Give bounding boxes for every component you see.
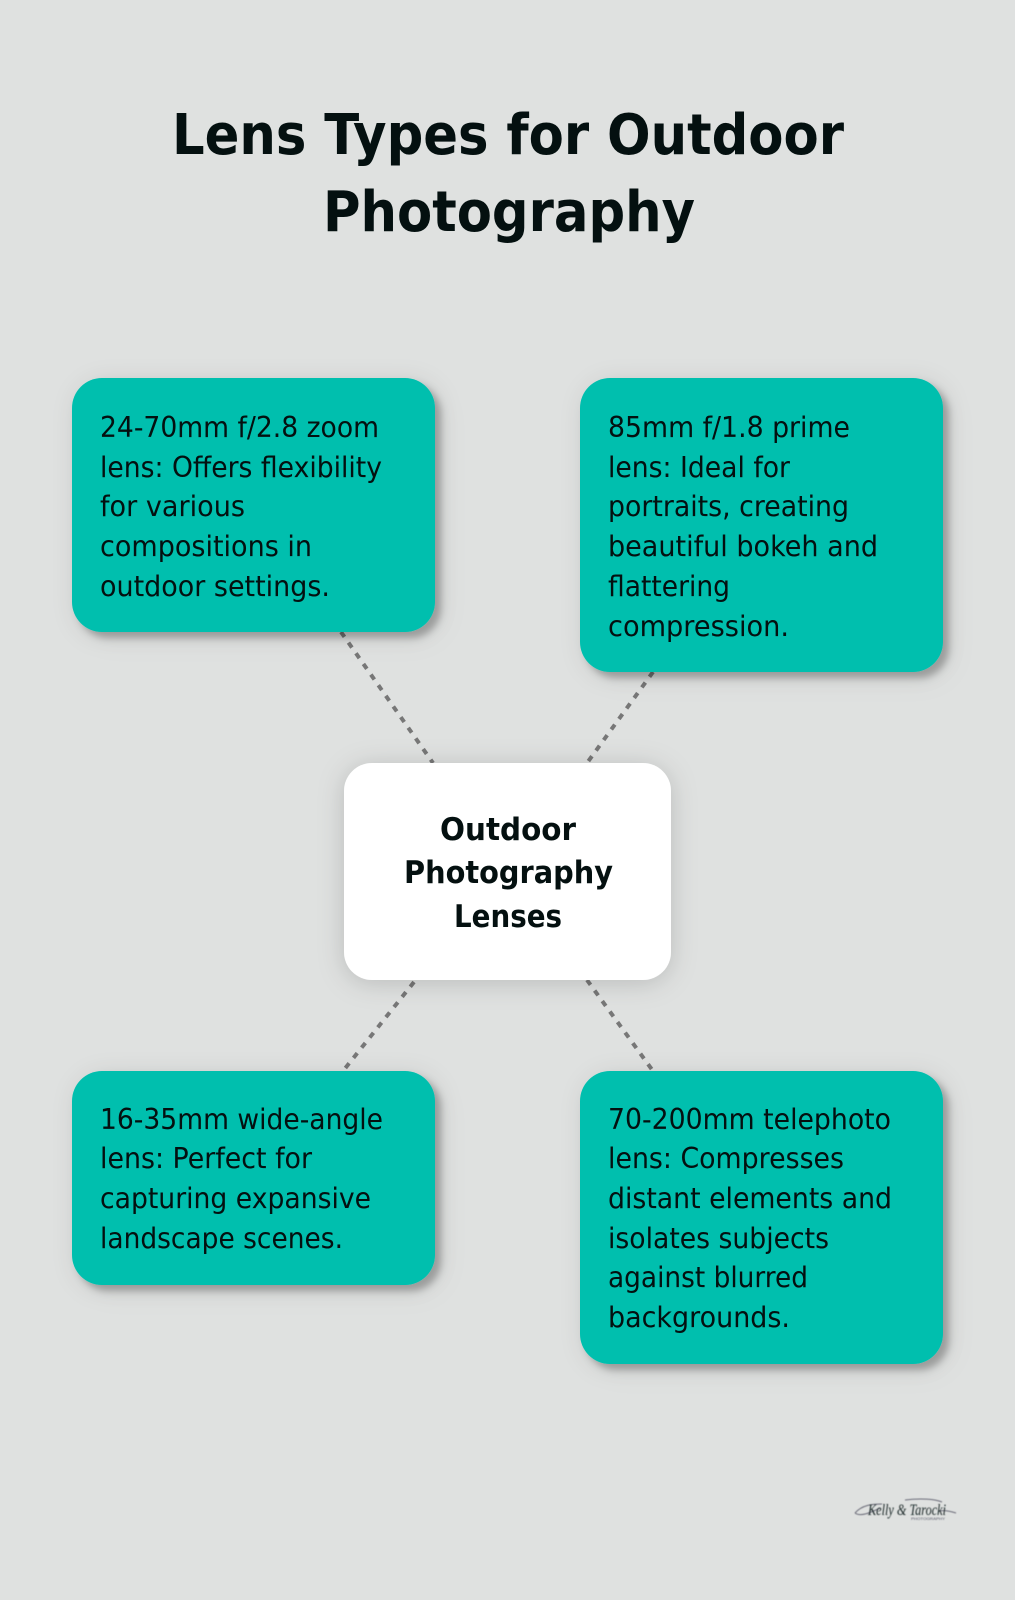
connector: 24-70mm card to centre bbox=[341, 632, 433, 763]
panel: 16-35mm wide-angle lens: lens: Perfect for bbox=[100, 1142, 312, 1175]
panel: centre node: Outdoor bbox=[440, 812, 576, 848]
panel: 24-70mm zoom lens: compositions in bbox=[100, 530, 312, 563]
title: Lens Types for Outdoor bbox=[172, 103, 844, 168]
panel: 85mm prime lens: flattering bbox=[608, 570, 730, 603]
panel: centre node bbox=[344, 763, 671, 980]
panel: 70-200mm telephoto lens: lens: Compresses bbox=[608, 1142, 844, 1175]
title bbox=[172, 103, 844, 245]
panel: 24-70mm zoom lens: 24-70mm f/2.8 zoom bbox=[100, 411, 379, 444]
panel: 70-200mm telephoto lens: against blurred bbox=[608, 1261, 808, 1294]
panel: centre node: Photography bbox=[404, 855, 613, 891]
panel: 70-200mm telephoto lens bbox=[580, 1071, 943, 1364]
title: Photography bbox=[323, 180, 695, 245]
panel: 16-35mm wide-angle lens: capturing expansive bbox=[100, 1182, 371, 1215]
panel: 70-200mm telephoto lens: isolates subjects bbox=[608, 1222, 829, 1255]
panel: 16-35mm wide-angle lens: 16-35mm wide-angle bbox=[100, 1103, 383, 1136]
panel: 24-70mm zoom lens: lens: Offers flexibility bbox=[100, 451, 382, 484]
panel: 70-200mm telephoto lens: 70-200mm telephoto bbox=[608, 1103, 891, 1136]
panel: 85mm prime lens: portraits, creating bbox=[608, 490, 849, 523]
panel: 85mm prime lens: lens: Ideal for bbox=[608, 451, 790, 484]
panel: 24-70mm zoom lens bbox=[72, 378, 435, 632]
panel: 16-35mm wide-angle lens: landscape scenes. bbox=[100, 1222, 343, 1255]
logo: signature: PHOTOGRAPHY bbox=[911, 1516, 945, 1521]
panel: 16-35mm wide-angle lens bbox=[72, 1071, 435, 1285]
panel: 85mm prime lens: beautiful bokeh and bbox=[608, 530, 878, 563]
panel: 70-200mm telephoto lens: distant elements and bbox=[608, 1182, 892, 1215]
panel: 85mm prime lens: compression. bbox=[608, 610, 789, 643]
panel: 24-70mm zoom lens: for various bbox=[100, 490, 245, 523]
connector: 16-35mm card to centre bbox=[343, 982, 414, 1071]
panel: 85mm prime lens: 85mm f/1.8 prime bbox=[608, 411, 850, 444]
panel: centre node: Lenses bbox=[454, 899, 562, 935]
panel: 85mm prime lens bbox=[580, 378, 943, 672]
panel: 70-200mm telephoto lens: backgrounds. bbox=[608, 1301, 790, 1334]
logo: signature: Kelly & Tarocki bbox=[867, 1502, 946, 1519]
connector: 85mm card to centre bbox=[587, 672, 653, 763]
panel: 24-70mm zoom lens: outdoor settings. bbox=[100, 570, 330, 603]
logo: signature bbox=[855, 1499, 956, 1521]
connector: 70-200mm card to centre bbox=[587, 980, 653, 1071]
